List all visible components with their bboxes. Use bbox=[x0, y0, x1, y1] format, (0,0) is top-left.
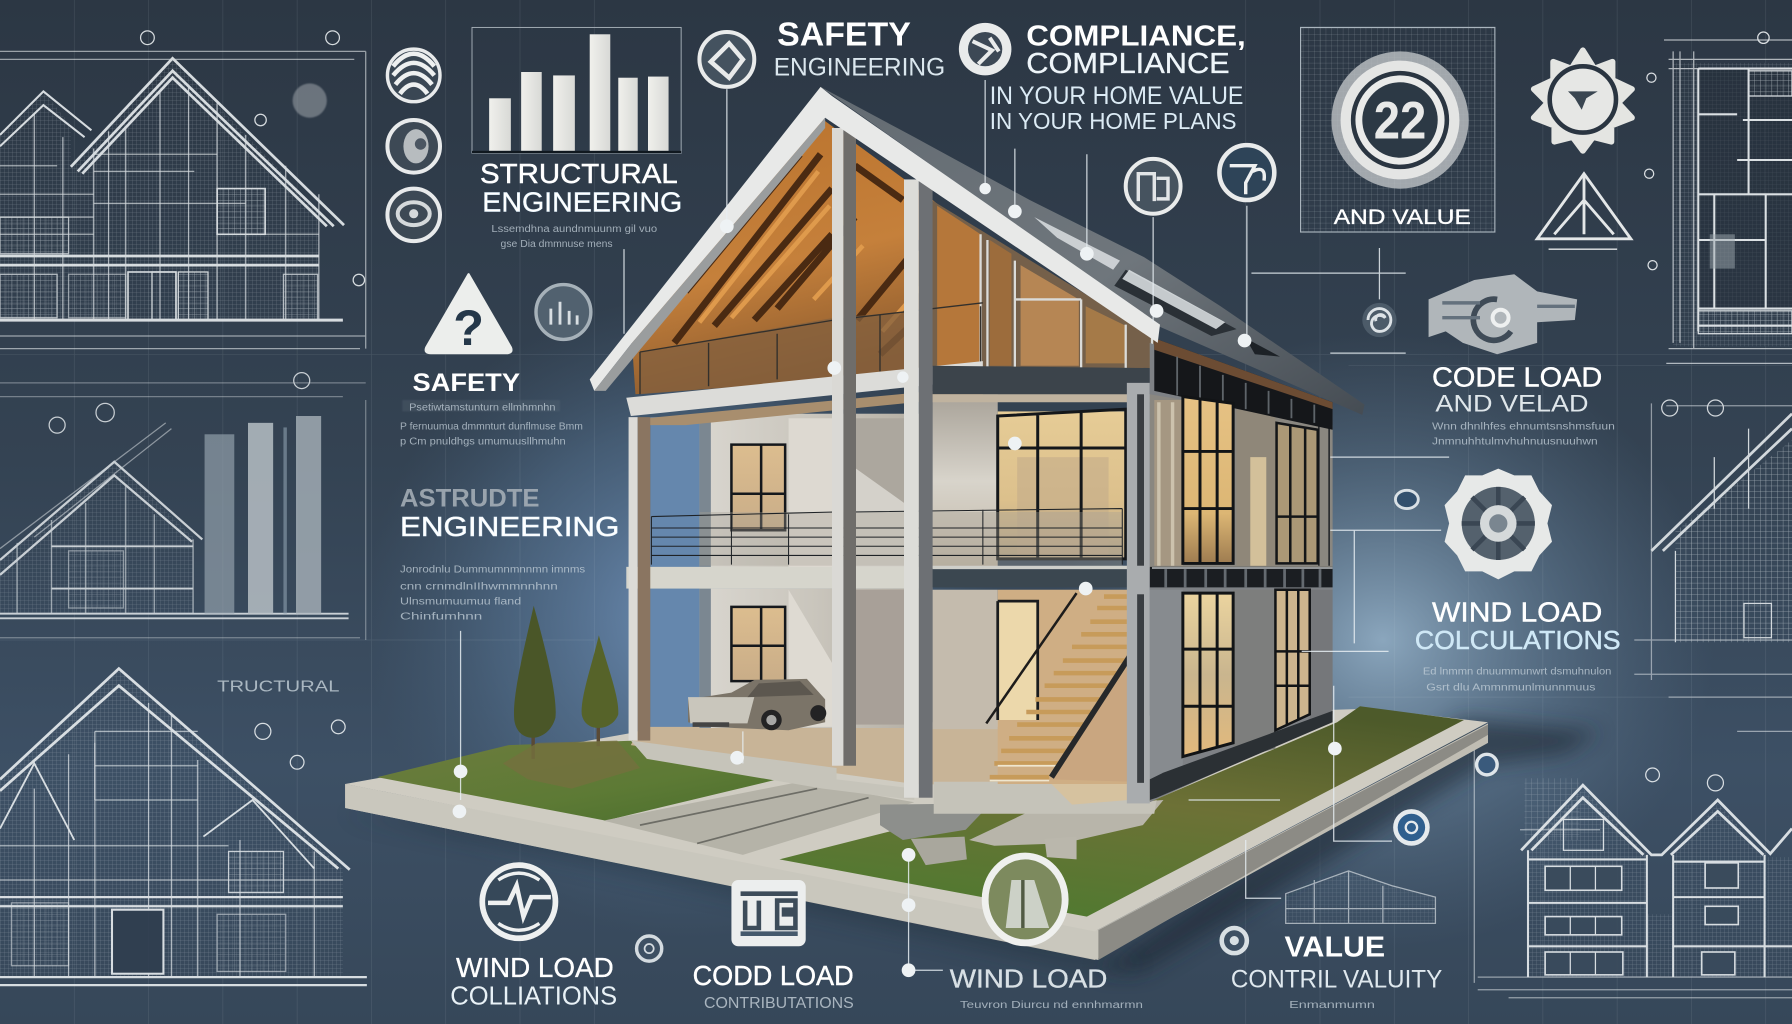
icon: small engineering badge bbox=[536, 285, 591, 339]
icon: roof truss triangle bbox=[1537, 174, 1631, 249]
text block: engineering: ENGINEERING bbox=[400, 511, 619, 542]
text block: engineering: Ulnsmumuumuu fland bbox=[400, 597, 521, 608]
heading: structural engineering: gse Dia dmmnuse mens bbox=[501, 239, 613, 250]
window: ground floor left bbox=[731, 607, 785, 681]
side windows upper right bbox=[1277, 423, 1318, 563]
lawn: right bbox=[779, 706, 1464, 917]
icon: top circle left bbox=[699, 32, 754, 87]
upper glazing bbox=[931, 200, 1158, 377]
heading: compliance: COMPLIANCE bbox=[1026, 48, 1230, 80]
blueprint: bottom-right twin houses bbox=[1474, 731, 1792, 998]
icon: blue ring lower right bbox=[1395, 811, 1427, 843]
heading: wind load calculations right: Ed lnmmn dnuummunwrt dsmuhnulon bbox=[1423, 666, 1612, 677]
heading: compliance bbox=[990, 21, 1246, 134]
icon: top right gear bbox=[1534, 50, 1632, 151]
heading: wind load collations bbox=[450, 952, 617, 1011]
side upper glazing bbox=[1150, 394, 1333, 568]
blueprint: top-left house drawing bbox=[0, 31, 366, 349]
concrete slabs bbox=[626, 361, 983, 416]
house bbox=[590, 87, 1365, 814]
blueprint: small value building bbox=[1286, 871, 1435, 923]
stone blocks bbox=[911, 837, 967, 865]
gable interior wood ceiling bbox=[632, 118, 981, 394]
text block: engineering: ASTRUDTE bbox=[400, 484, 539, 512]
heading: wind load calculations right bbox=[1415, 597, 1621, 693]
heading: safety engineering top bbox=[774, 17, 945, 81]
text block: engineering: cnn crnmdlnIIhwmmnnhnn bbox=[400, 582, 558, 593]
columns illustration bbox=[205, 416, 321, 614]
icon: wind load lens on lawn bbox=[985, 856, 1065, 943]
entry mat and gravel bbox=[880, 803, 991, 840]
staircase bbox=[986, 593, 1134, 782]
ground platform bbox=[345, 706, 1488, 960]
heading: value: VALUE bbox=[1285, 932, 1385, 964]
roof slope bbox=[821, 87, 1365, 415]
panel: value gauge bbox=[1301, 27, 1495, 232]
heading: code load and value: Wnn dhnlhfes ehnumtsnshmsfuun bbox=[1432, 422, 1615, 433]
icon: three badge circles bbox=[387, 49, 440, 241]
text block: safety: P fernuumua dmmnturt dunflmuse Bmm bbox=[400, 422, 583, 433]
heading: safety engineering top: SAFETY bbox=[777, 17, 911, 54]
icon: small ring bbox=[637, 936, 662, 961]
heading: wind load collations: WIND LOAD bbox=[456, 952, 614, 983]
heading: wind load lower: Teuvron Diurcu nd ennhmarmn bbox=[960, 1000, 1143, 1011]
heading: safety engineering top: ENGINEERING bbox=[774, 53, 945, 81]
heading: wind load collations: COLLIATIONS bbox=[450, 981, 617, 1011]
heading: wind load calculations right: Gsrt dlu Ammnmunlmunnmuus bbox=[1426, 682, 1595, 693]
heading: code load and value: AND VELAD bbox=[1435, 390, 1589, 417]
heading: value bbox=[1231, 932, 1443, 1011]
lawn: left bbox=[377, 741, 777, 821]
trees bbox=[503, 606, 640, 789]
plinth bbox=[631, 741, 914, 800]
heading: wind load lower: WIND LOAD bbox=[950, 963, 1107, 993]
icon: large gear bbox=[1445, 469, 1552, 579]
heading: wind load calculations right: WIND LOAD bbox=[1432, 597, 1602, 628]
text block: safety: SAFETY bbox=[413, 369, 520, 397]
heading: structural engineering: ENGINEERING bbox=[482, 186, 682, 217]
gauge number: 22 bbox=[1374, 91, 1426, 150]
window: mid floor left bbox=[731, 445, 785, 530]
blueprint label: structural: TRUCTURAL bbox=[217, 678, 340, 695]
heading: codd load: CONTRIBUTATIONS bbox=[704, 995, 854, 1012]
callout lines and pins bbox=[453, 80, 1449, 977]
mid balcony railing bbox=[651, 509, 1122, 566]
door: ground floor bbox=[998, 601, 1038, 720]
gable fascia bbox=[590, 87, 1160, 391]
heading: code load and value bbox=[1432, 361, 1615, 448]
heading: wind load lower bbox=[950, 963, 1143, 1011]
side windows upper left bbox=[1183, 397, 1233, 563]
text block: engineering: Jonrodnlu Dummumnmnnmn imnms bbox=[400, 565, 585, 576]
heading: code load and value: Jnmnuhhtulmvhuhnuusnuuhwn bbox=[1432, 437, 1598, 448]
paved path bbox=[603, 782, 914, 855]
heading: structural engineering: Lssemdhna aundnmuunm gil vuo bbox=[491, 224, 657, 235]
side lower panels bbox=[1150, 590, 1333, 793]
floor deck bbox=[631, 727, 1150, 789]
heading: compliance: IN YOUR HOME PLANS bbox=[990, 108, 1237, 134]
icon: warning triangle: ? bbox=[453, 299, 484, 356]
heading: structural engineering bbox=[480, 158, 682, 250]
heading: code load and value: CODE LOAD bbox=[1432, 361, 1602, 392]
text block: safety: Psetiwtamstunturn ellmhmnhn bbox=[409, 402, 556, 413]
side mid band bbox=[1150, 567, 1333, 587]
icon: top circle mid bbox=[959, 23, 1011, 75]
text block: safety: p Cm pnuldhgs umumuusllhmuhn bbox=[400, 437, 566, 448]
text block: safety bbox=[400, 369, 583, 448]
icon: roof pin badge two bbox=[1219, 145, 1274, 200]
icon: warning triangle bbox=[426, 274, 511, 356]
icon: ring far lower right bbox=[1477, 754, 1497, 775]
heading: and value: AND VALUE bbox=[1334, 204, 1471, 229]
icon: code load tools bbox=[1429, 274, 1577, 354]
icon: roof pin badge one bbox=[1126, 159, 1181, 214]
heading: wind load calculations right: COLCULATIONS bbox=[1415, 625, 1621, 655]
car bbox=[688, 679, 826, 730]
side windows lower right bbox=[1275, 590, 1310, 730]
ground floor wall bbox=[699, 589, 933, 728]
icon: wind load badge bbox=[482, 865, 555, 938]
side upper frame band bbox=[1154, 338, 1333, 430]
heading: value: CONTRIL VALUITY bbox=[1231, 965, 1443, 993]
icon: document square bbox=[731, 880, 806, 946]
upper balcony railing bbox=[640, 303, 983, 394]
blueprint: bottom-left house drawing bbox=[0, 669, 367, 985]
icon: small badge bottom bbox=[1222, 928, 1247, 953]
blueprint: mid-left house and columns bbox=[0, 373, 366, 640]
heading: compliance: COMPLIANCE, bbox=[1026, 21, 1246, 53]
mid floor wall bbox=[699, 414, 933, 568]
side wall bbox=[1150, 343, 1333, 802]
heading: codd load bbox=[693, 960, 854, 1012]
heading: compliance: IN YOUR HOME VALUE bbox=[990, 82, 1243, 110]
icon: small blue ring bbox=[1395, 490, 1418, 509]
window: mid floor large bbox=[998, 409, 1126, 559]
sky gap behind ground and mid floors bbox=[650, 417, 699, 731]
blueprint: mid-right house drawing bbox=[1634, 400, 1792, 697]
text block: engineering bbox=[400, 484, 619, 622]
icon: spiral ring bbox=[1362, 303, 1397, 337]
corner post bbox=[1127, 383, 1150, 803]
heading: codd load: CODD LOAD bbox=[693, 960, 854, 991]
heading: value: Enmanmumn bbox=[1289, 1000, 1375, 1011]
slab underside bbox=[646, 386, 983, 425]
columns bbox=[629, 417, 650, 741]
side windows lower left bbox=[1183, 593, 1233, 757]
bar chart panel bbox=[472, 27, 681, 153]
heading: structural engineering: STRUCTURAL bbox=[480, 158, 678, 189]
blueprint: top-right floor plan bbox=[1645, 32, 1792, 363]
text block: engineering: Chinfumhnn bbox=[400, 611, 483, 622]
